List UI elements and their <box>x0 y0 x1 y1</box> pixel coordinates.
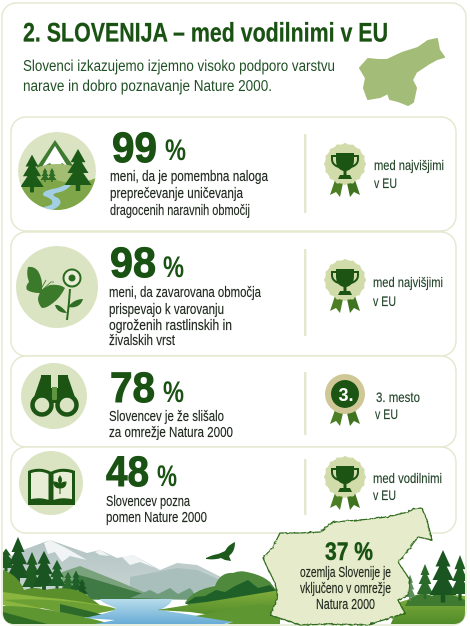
figure: 48 %: % <box>157 460 177 493</box>
ranking: med najvišjimi <box>374 157 444 173</box>
icon: mountains and river <box>18 132 96 215</box>
description: Slovencev je že slišalo <box>109 409 224 425</box>
figure: 48 %: 48 <box>106 448 149 496</box>
description: meni, da zavarovana območja <box>109 285 262 301</box>
description: ozemlja Slovenije je <box>300 565 391 581</box>
description <box>110 169 269 219</box>
description: Natura 2000 <box>316 597 375 613</box>
description: pomen Nature 2000 <box>106 510 207 526</box>
description: ogroženih rastlinskih in <box>109 318 232 334</box>
icon: binoculars <box>21 363 87 429</box>
figure: 98 %: % <box>163 251 184 284</box>
description: meni, da je pomembna naloga <box>110 169 269 185</box>
figure: 37 %: 37 % <box>325 538 373 566</box>
landscape illustration <box>0 537 470 626</box>
ranking: v EU <box>374 175 397 191</box>
description <box>106 494 207 526</box>
icon: trophy medal <box>325 260 365 313</box>
icon: trophy medal <box>325 457 365 510</box>
panel: 99 % <box>11 117 456 231</box>
ranking: v EU <box>373 487 396 503</box>
map callout: 37 % <box>263 508 432 625</box>
figure: 99 %: 99 <box>112 124 157 172</box>
figure: 78 % <box>110 364 184 412</box>
ranking <box>375 389 420 422</box>
figure: 98 %: 98 <box>110 239 156 287</box>
intro text: narave in dobro poznavanje Nature 2000. <box>23 78 272 95</box>
map outline <box>263 508 432 625</box>
intro text <box>23 58 335 95</box>
intro text: Slovenci izkazujemo izjemno visoko podporo varstvu <box>23 58 335 75</box>
ranking: v EU <box>375 406 398 422</box>
ranking: v EU <box>373 293 396 309</box>
ranking <box>374 157 444 191</box>
description <box>300 565 391 613</box>
icon: map of Slovenia <box>360 39 444 105</box>
description: vključeno v omrežje <box>300 581 391 597</box>
figure: 48 % <box>106 448 177 496</box>
ranking <box>373 274 443 309</box>
icon: third place medal <box>325 374 365 426</box>
ranking: med najvišjimi <box>373 274 443 290</box>
figure: 99 %: % <box>165 134 186 167</box>
description: dragocenih naravnih območij <box>110 203 250 219</box>
ranking: med vodilnimi <box>373 470 442 486</box>
panel: 98 % <box>11 232 456 356</box>
description: prispevajo k varovanju <box>109 302 224 318</box>
icon: butterfly and flower <box>16 246 98 328</box>
icon: eagle <box>206 542 235 561</box>
ranking: 3. mesto <box>376 389 420 405</box>
description <box>109 285 262 349</box>
description: Slovencev pozna <box>106 494 191 510</box>
description: preprečevanje uničevanja <box>110 186 244 202</box>
figure: 98 % <box>110 239 184 287</box>
description: živalskih vrst <box>109 333 175 349</box>
icon: trophy medal <box>325 144 365 197</box>
figure: 99 % <box>112 124 186 172</box>
ranking <box>373 470 442 503</box>
figure: 78 %: 78 <box>110 364 155 412</box>
panel: 78 % <box>11 356 456 447</box>
description: za omrežje Natura 2000 <box>109 425 233 441</box>
description <box>109 409 233 441</box>
figure: 78 %: % <box>163 376 184 409</box>
icon: third place medal: 3. <box>338 385 354 405</box>
icon: open book <box>19 451 83 515</box>
panel: 48 % <box>11 447 456 533</box>
